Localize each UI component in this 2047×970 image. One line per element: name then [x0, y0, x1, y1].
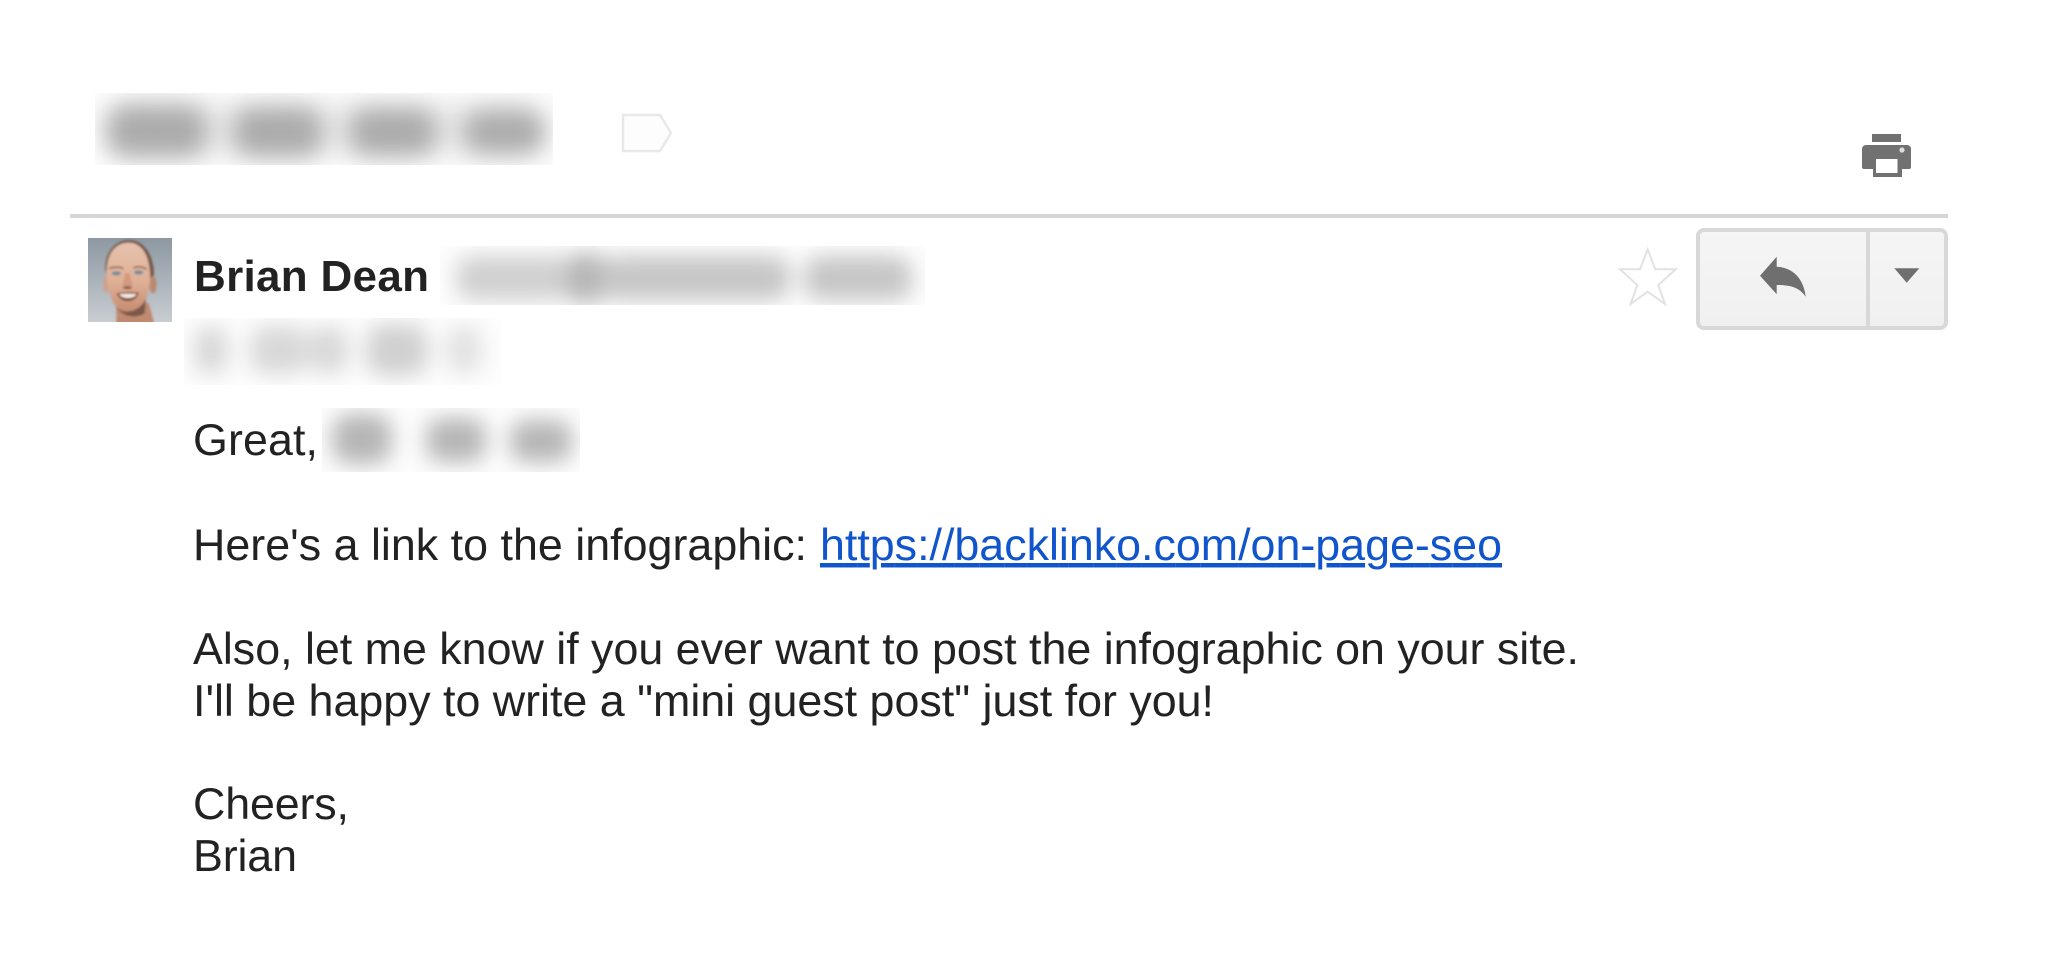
- icon: reply arrow: [1760, 257, 1806, 297]
- redacted subject line: [95, 93, 553, 165]
- sender name: Brian Dean: [194, 252, 429, 301]
- reply button group: [1698, 230, 1946, 328]
- link: https://backlinko.com/on-page-seo: [820, 520, 1502, 570]
- redacted sender email: [440, 246, 925, 305]
- body: infographic link line: Here's a link to the infographic:: [193, 520, 807, 570]
- body: guest post offer line one: Also, let me know if you ever want to post the infographic on your site.: [193, 624, 1579, 674]
- sign-off: name: Brian: [193, 831, 297, 881]
- body: guest post offer line two: I'll be happy to write a "mini guest post" just for you!: [193, 676, 1214, 726]
- greeting: Great,: [193, 415, 318, 465]
- redacted greeting name: [322, 408, 580, 472]
- icon: printer: [1862, 134, 1911, 177]
- avatar: Brian Dean portrait: [88, 238, 172, 325]
- icon: label tag: [623, 115, 671, 151]
- redacted recipient line: [184, 318, 501, 385]
- icon: dropdown caret: [1894, 268, 1919, 283]
- header divider: [70, 214, 1948, 218]
- sign-off: cheers: Cheers,: [193, 779, 349, 829]
- icon: star: [1620, 249, 1676, 304]
